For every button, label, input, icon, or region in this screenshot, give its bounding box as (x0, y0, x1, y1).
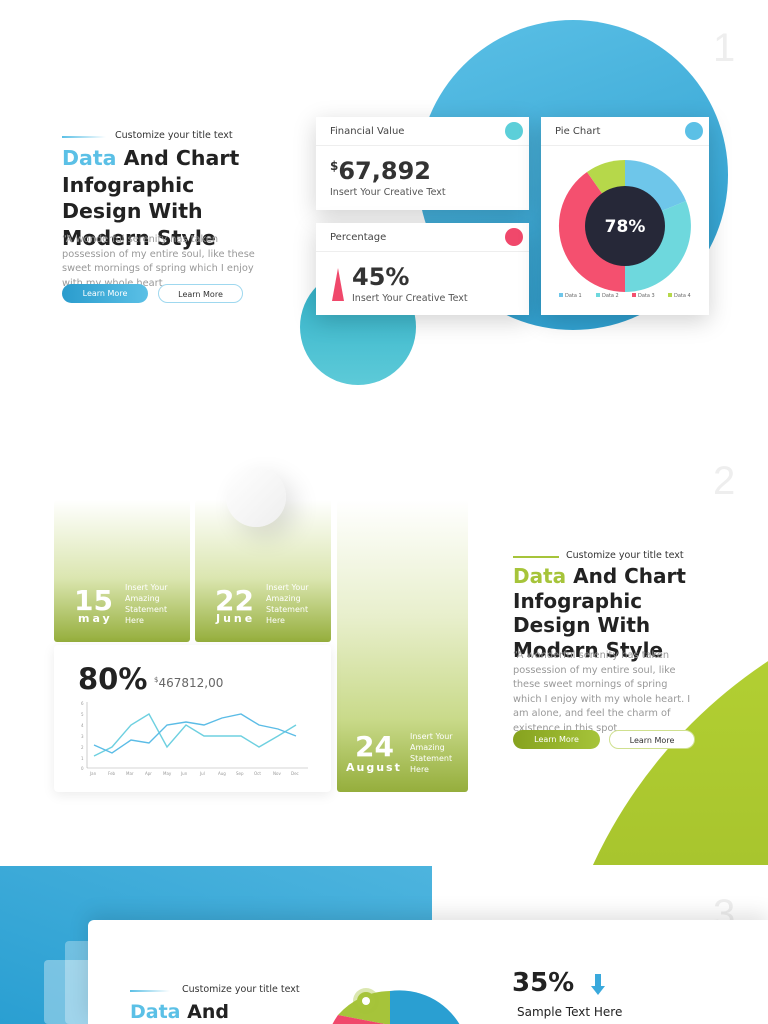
card: percentage: 45% (352, 263, 409, 291)
number 3: 3 (713, 892, 735, 936)
white circle (226, 467, 286, 527)
section 2 text block: Customize your title text (566, 550, 684, 561)
section 1 text block: Customize your title text (115, 130, 233, 141)
number 1: 1 (713, 26, 735, 70)
line chart: Apr (145, 771, 152, 776)
green card 22 june: 22 (215, 584, 254, 617)
green card 24 august: Insert Your (410, 732, 453, 741)
line chart: Sep (236, 771, 244, 776)
section 3 title: Customize your title text (182, 984, 300, 995)
section 2 text block: “A wonderful serenity has taken possession of my entire soul, like these sweet mornings of spring which I enjoy with my whole heart. I am alone, and feel the charm of existence in this spot (513, 650, 690, 734)
card: percentage: Percentage (330, 232, 386, 243)
card: percentage (316, 223, 529, 315)
donut chart: Data 1 (565, 293, 582, 299)
stat 35%: Sample Text Here (517, 1005, 622, 1019)
line chart card: $467812,00 (154, 676, 223, 690)
green card 22 june: Here (266, 616, 285, 625)
green card 24 august: Statement (410, 754, 452, 763)
donut chart: Data 3 (638, 293, 655, 299)
layered translucent panels (44, 960, 104, 1024)
green card 22 june: Insert Your (266, 583, 309, 592)
pie chart partial (332, 988, 460, 1024)
line chart: May (163, 771, 172, 776)
number 2: 2 (713, 459, 735, 503)
green card 15 may: Statement (125, 605, 167, 614)
line chart: 0 (81, 766, 84, 771)
line chart: 2 (81, 745, 84, 750)
green card 22 june (195, 500, 331, 642)
stat 35%: 35% (512, 968, 574, 998)
line chart: Jul (199, 771, 205, 776)
green card 24 august: Amazing (410, 743, 445, 752)
donut chart: Data 2 (602, 293, 619, 299)
donut chart (558, 160, 691, 299)
line chart: 6 (81, 701, 84, 706)
card: financial value (316, 117, 529, 210)
section 1 text block: Data And Chart Infographic Design With Modern Style (62, 146, 239, 250)
green card 24 august (337, 500, 468, 792)
green card 15 may: may (78, 612, 113, 625)
green card 15 may: Insert Your (125, 583, 168, 592)
teal circle (300, 269, 416, 385)
green card 15 may: Amazing (125, 594, 160, 603)
section 1 text block (62, 130, 255, 303)
green card 15 may: Here (125, 616, 144, 625)
line chart: Jun (180, 771, 188, 776)
section 3 title: Data And (130, 1001, 229, 1023)
donut chart: 78% (605, 217, 645, 237)
line chart: Dec (291, 771, 299, 776)
green card 24 august: August (346, 761, 402, 774)
section 1 text block: Learn More (178, 290, 223, 299)
line chart card (54, 645, 331, 792)
green card 24 august: 24 (355, 730, 394, 763)
green card 22 june: June (216, 612, 255, 625)
green card 22 june: Statement (266, 605, 308, 614)
line chart: Jan (89, 771, 97, 776)
green card 24 august: Here (410, 765, 429, 774)
line chart: 1 (81, 756, 84, 761)
line chart card: 80% (78, 662, 147, 696)
card: percentage: Insert Your Creative Text (352, 293, 468, 304)
section 1 text block: “A wonderful serenity has taken possession of my entire soul, like these sweet mornings of spring which I enjoy with my whole heart. (62, 234, 255, 288)
line chart: Nov (273, 771, 281, 776)
card: pie chart: Pie Chart (555, 126, 600, 137)
section 3 blue background (0, 866, 432, 1024)
section 3 title (130, 984, 300, 1023)
section 3 white card (88, 920, 768, 1024)
line chart: 4 (81, 723, 84, 728)
stat 35% (512, 968, 622, 1019)
section 2 text block: Data And Chart Infographic Design With Modern Style (513, 564, 686, 662)
card: pie chart (541, 117, 709, 315)
green card 22 june: Amazing (266, 594, 301, 603)
green card 15 may (54, 500, 190, 642)
section 2 text block (513, 550, 695, 749)
green card 15 may: 15 (74, 584, 113, 617)
card: financial value: Insert Your Creative Text (330, 187, 446, 198)
line chart: Aug (218, 771, 226, 776)
green curved shape (593, 661, 768, 865)
section 2 text block: Learn More (630, 736, 674, 745)
line chart: 3 (81, 734, 84, 739)
big blue circle (418, 20, 728, 330)
card: financial value: Financial Value (330, 126, 404, 137)
card: financial value: $67,892 (330, 157, 431, 185)
icon badge (353, 988, 379, 1014)
line chart: Mar (126, 771, 134, 776)
line chart (81, 701, 308, 776)
line chart: 5 (81, 712, 84, 717)
section 1 text block: Learn More (83, 289, 127, 298)
line chart: Oct (254, 771, 261, 776)
line chart: Feb (108, 771, 116, 776)
donut chart: Data 4 (674, 293, 691, 299)
section 2 text block: Learn More (534, 735, 579, 744)
